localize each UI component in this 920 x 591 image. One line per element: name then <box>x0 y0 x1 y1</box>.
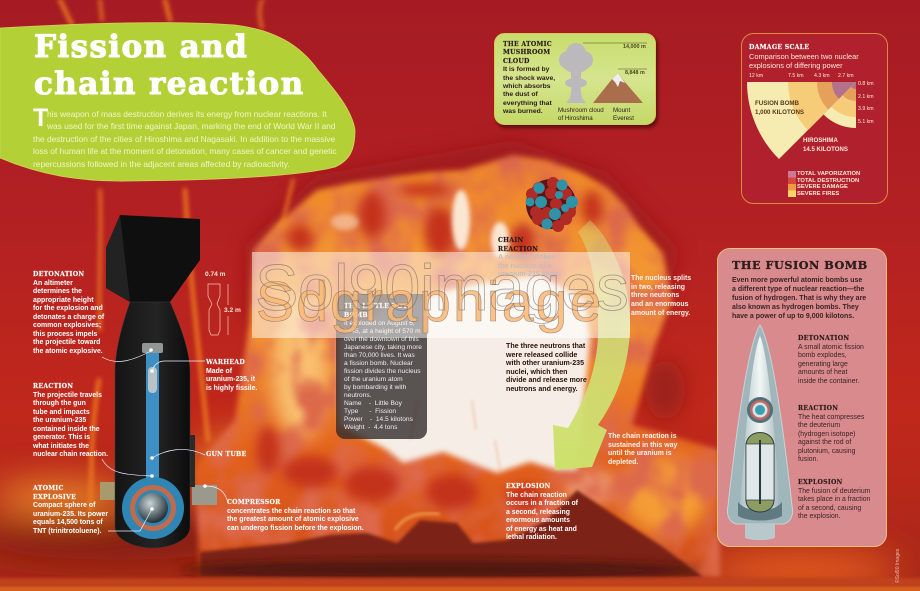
radius labels: 7.5 km <box>788 73 804 79</box>
text: mushroom heading and copy <box>503 40 555 115</box>
text: compressor: concentrates the chain reaction so that the greatest amount of atomic explosive can undergo fission before the explosion. <box>227 508 364 532</box>
credit: ©Sol90 Images <box>895 549 901 583</box>
watermark: filled layer: Sdgraphiage <box>256 270 603 334</box>
white core <box>338 275 590 473</box>
damage heading: DAMAGE SCALE <box>749 44 809 51</box>
tail fin <box>106 215 200 302</box>
text: atomic explosive <box>32 484 108 534</box>
distance labels: 0.8 km 2.1 km 3.9 km 5.1 km <box>858 81 874 125</box>
small bomb outline <box>208 284 228 335</box>
damage heading <box>749 44 859 70</box>
panel: little boy <box>336 294 427 439</box>
panel: atomic mushroom cloud: Mushroom cloud of Hiroshima <box>558 107 604 122</box>
projectile <box>148 367 157 393</box>
title: Fission and chain reaction <box>34 29 305 102</box>
text: detonation: An altimeter determines the appropriate height for the explosion and detonates a charge of common explosives; this process impels the projectile toward the atomic explosive. <box>33 280 104 354</box>
bomb body <box>115 302 190 548</box>
legend swatches <box>788 171 796 178</box>
watermark text <box>256 262 627 334</box>
panel: atomic mushroom cloud: 8,848 m <box>625 70 645 76</box>
dark cloud <box>200 490 703 577</box>
little boy data: Name - Little Boy Type - Fission Power - 14.5 kilotons Weight - 4.4 tons <box>344 400 413 431</box>
bottom fire strip <box>0 578 920 591</box>
text: detonation: DETONATION <box>33 271 84 278</box>
icon: mountain <box>593 73 643 103</box>
text: atomic explosive: ATOMIC EXPLOSIVE <box>33 485 76 500</box>
radius labels: 4.3 km <box>814 73 830 79</box>
text: sustained: The chain reaction is sustained in this way until the uranium is depleted. <box>608 433 677 466</box>
fusion heading: THE FUSION BOMB <box>732 258 868 272</box>
panel: atomic mushroom cloud: Mount Everest <box>613 107 634 122</box>
text: explosion: The chain reaction occurs in a fraction of a second, releasing enormous amounts of energy as heat and lethal radiation. <box>506 492 578 541</box>
text: warhead: WARHEAD <box>206 359 245 366</box>
fusion intro: Even more powerful atomic bombs use a different type of nuclear reaction—the fusion of hydrogen. That is why they are also known as hydrogen bombs. They have a power of up to 9,000 kilotons. <box>732 277 866 320</box>
label: bomb width: 0.74 m <box>205 271 226 278</box>
leader lines <box>102 351 228 531</box>
label: fusion bomb: FUSION BOMB 1,000 KILOTONS <box>755 100 804 116</box>
compressor fins <box>100 482 116 500</box>
fusion reaction: The heat compresses the deuterium (hydrogen isotope) against the rod of plutonium, causing fusion. <box>798 414 864 463</box>
fusion detonation: DETONATION <box>798 335 849 342</box>
radius labels <box>749 73 854 79</box>
text: reaction: REACTION <box>33 383 73 390</box>
title panel <box>0 22 356 182</box>
fusion explosion: EXPLOSION <box>798 479 843 486</box>
text: atomic explosive: Compact sphere of uranium-235. Its power equals 14,500 tons of TNT (trinitrotoluene). <box>33 502 108 534</box>
text: three neutrons: The three neutrons that were released collide with other uranium-235 nuclei, which then divide and release more neutrons and energy. <box>506 342 587 392</box>
mottling <box>256 183 603 512</box>
panel: atomic mushroom cloud <box>494 33 656 125</box>
labels: heights and captions: 14,000 m <box>623 44 646 50</box>
atomic sphere <box>122 477 184 539</box>
label: hiroshima: HIROSHIMA 14.5 KILOTONS <box>803 137 848 153</box>
label: bomb length: 3.2 m <box>224 307 241 314</box>
text: chain reaction <box>498 236 560 278</box>
explosion body <box>190 150 730 580</box>
text: reaction: The projectile travels through the gun tube and impacts the uranium-235 contained inside the generator. This is what initiates the nuclear chain reaction. <box>33 392 108 458</box>
text: mushroom heading and copy: THE ATOMIC MUSHROOM CLOUD <box>503 41 552 65</box>
text: compressor: COMPRESSOR <box>227 499 281 506</box>
legend: TOTAL VAPORIZATION TOTAL DESTRUCTION SEVERE DAMAGE SEVERE FIRES <box>797 171 860 196</box>
radius labels: 2.7 km <box>838 73 854 79</box>
text: nucleus splits: The nucleus splits in two, releasing three neutrons and an enormous amount of energy. <box>631 275 691 317</box>
damage heading: Comparison between two nuclear explosions of differing power <box>749 52 859 70</box>
text: mushroom heading and copy: It is formed by the shock wave, which absorbs the dust of everything that was burned. <box>503 66 555 115</box>
green blob <box>0 22 356 182</box>
fusion detonation: A small atomic fission bomb explodes, generating large amounts of heat inside the container. <box>798 344 864 384</box>
watermark band <box>252 252 630 338</box>
icon: fusion bomb cross-section <box>727 324 793 540</box>
panel: fusion bomb <box>717 248 887 547</box>
little boy copy: It exploded on August 6, 1945, at a height of 570 m over the downtown of this Japanese city, taking more than 70,000 lives. It was a fission bomb. Nuclear fission divides the nucleus of the uranium atom by bombarding it with neutrons. <box>344 320 422 399</box>
chart: damage sectors <box>747 82 856 159</box>
panel: damage scale <box>741 33 888 204</box>
text: chain reaction: A neutron strikes the nucleus of a uranium-235 atom. <box>498 254 560 278</box>
little boy copy: THE LITTLE BOY BOMB <box>344 303 407 318</box>
text: warhead: Made of uranium-235, it is highly fissile. <box>206 368 257 392</box>
intro text: T <box>33 104 48 132</box>
text: chain reaction: CHAIN REACTION <box>498 237 538 252</box>
icon: mushroom cloud <box>559 43 593 103</box>
label: gun tube: GUN TUBE <box>206 451 246 458</box>
gun tube <box>146 347 159 478</box>
fusion reaction: REACTION <box>798 405 838 412</box>
radius labels: 12 km <box>749 73 763 79</box>
intro text: his weapon of mass destruction derives its energy from nuclear reactions. It was used for the first time against Japan, marking the end of World War II and the destruction of the cities of Hiroshima and Nagasaki. In addition to the massive loss of human life at the moment of detonation, many cases of cancer and genetic repercussions followed in the adjacent areas affected by radioactivity. <box>33 109 337 169</box>
fusion explosion: The fusion of deuterium takes place in a fraction of a second, causing the explosion. <box>798 488 870 520</box>
text: explosion: EXPLOSION <box>506 483 551 490</box>
